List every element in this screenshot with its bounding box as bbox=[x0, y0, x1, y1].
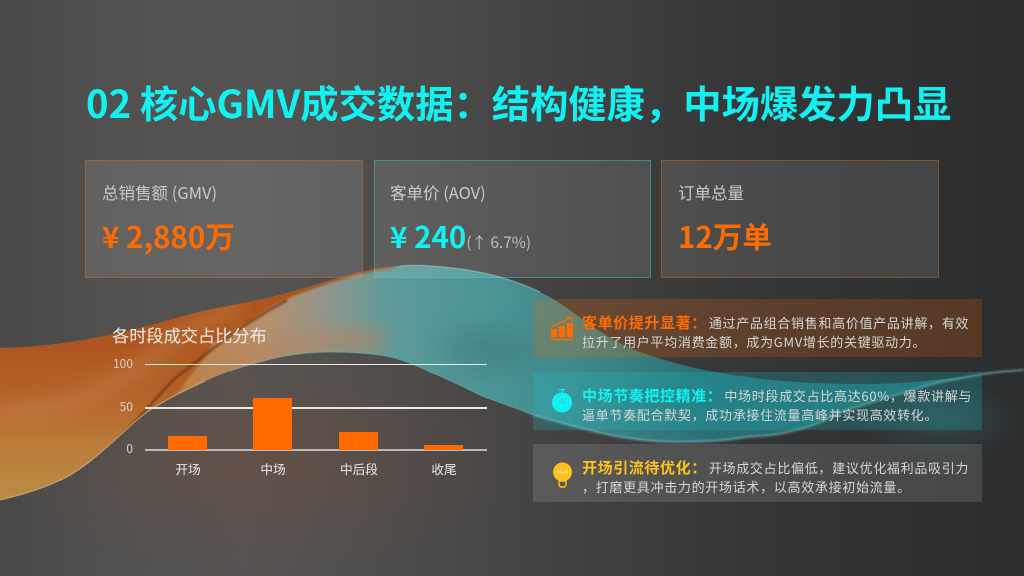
orders value: 12万单 bbox=[678, 215, 772, 257]
x axis labels bbox=[175, 459, 457, 478]
panel: orders card bbox=[661, 160, 939, 278]
insight text bbox=[582, 385, 972, 424]
panel: GMV card bbox=[85, 160, 363, 278]
panel: insight rhythm bbox=[533, 372, 982, 430]
x axis labels: 中场 bbox=[260, 459, 286, 478]
bars bbox=[168, 436, 207, 450]
GMV value: ¥ 2,880万 bbox=[102, 215, 235, 257]
background flowing wave bbox=[0, 264, 1024, 512]
insight text: 开场引流待优化：开场成交占比偏低，建议优化福利品吸引力 bbox=[582, 457, 969, 478]
grid lines bbox=[145, 364, 487, 365]
icon: growth chart bbox=[550, 316, 574, 340]
GMV label: 总销售额 (GMV) bbox=[102, 180, 217, 204]
insight text bbox=[582, 457, 969, 496]
AOV label: 客单价 (AOV) bbox=[390, 180, 486, 204]
bar chart bbox=[113, 355, 487, 478]
icon: stopwatch bbox=[552, 389, 572, 412]
x axis labels: 收尾 bbox=[431, 459, 457, 478]
insight text: 客单价提升显著：通过产品组合销售和高价值产品讲解，有效 bbox=[582, 312, 969, 333]
insight text bbox=[582, 312, 969, 351]
panel: insight opening bbox=[533, 444, 982, 502]
y axis labels: 50 bbox=[120, 398, 133, 415]
insight text: 拉升了用户平均消费金额，成为GMV增长的关键驱动力。 bbox=[582, 332, 926, 351]
AOV value with change: ¥ 240(↑ 6.7%) bbox=[390, 215, 531, 257]
insight text: ，打磨更具冲击力的开场话术，以高效承接初始流量。 bbox=[582, 477, 911, 496]
title: 02 核心GMV成交数据：结构健康，中场爆发力凸显 bbox=[86, 75, 951, 130]
y axis labels: 0 bbox=[126, 440, 133, 457]
panel: AOV card bbox=[374, 160, 651, 278]
chart heading: 各时段成交占比分布 bbox=[112, 322, 267, 347]
insight text: 中场节奏把控精准：中场时段成交占比高达60%，爆款讲解与 bbox=[582, 385, 972, 406]
x axis labels: 开场 bbox=[175, 459, 201, 478]
x axis labels: 中后段 bbox=[340, 459, 378, 478]
panel: insight AOV bbox=[533, 299, 982, 357]
icon: light bulb bbox=[553, 462, 572, 488]
insight text: 逼单节奏配合默契，成功承接住流量高峰并实现高效转化。 bbox=[582, 405, 938, 424]
orders label: 订单总量 bbox=[678, 180, 744, 204]
y axis labels bbox=[113, 355, 133, 457]
y axis labels: 100 bbox=[113, 355, 133, 372]
